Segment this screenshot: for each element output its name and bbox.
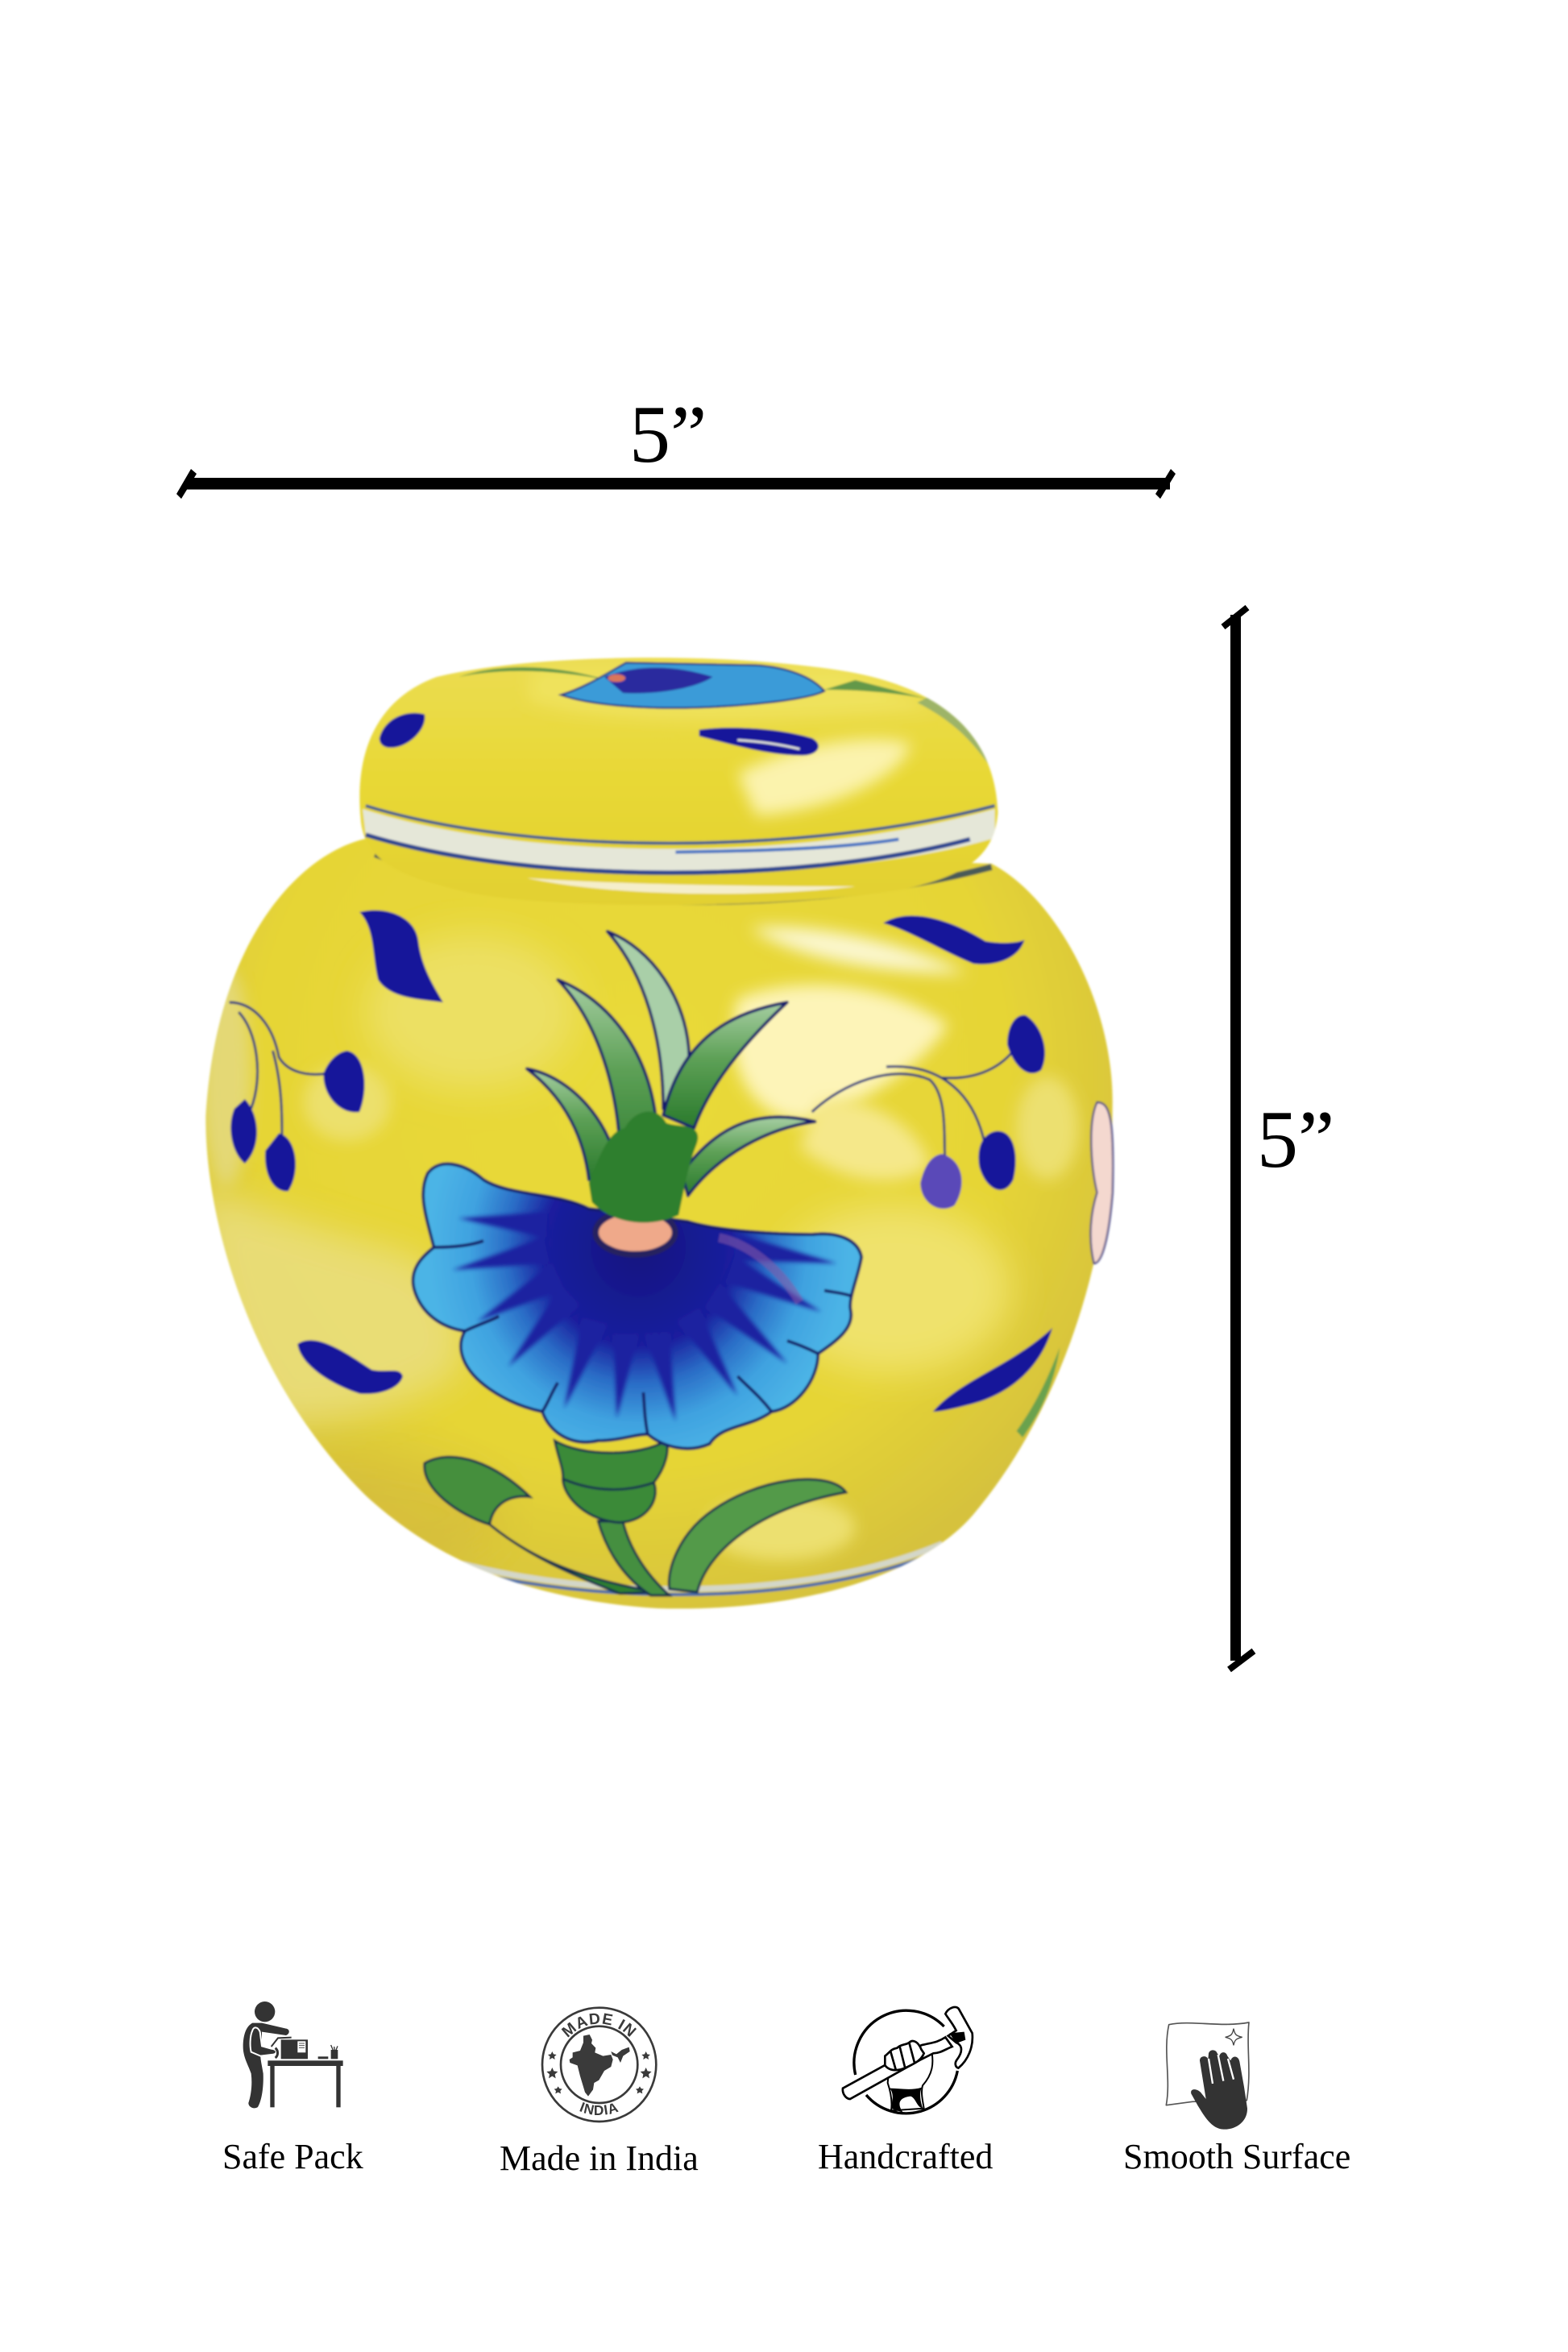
label: safe pack: Safe Pack xyxy=(222,2137,363,2176)
height dimension arrow xyxy=(1223,608,1254,1670)
lid flower xyxy=(561,662,824,708)
lid markings xyxy=(380,713,819,756)
jar floral buds and leaves xyxy=(230,911,1113,1437)
icon: made in india seal xyxy=(541,2006,657,2122)
label: handcrafted: Handcrafted xyxy=(818,2137,993,2176)
icon: made in india seal: INDIA xyxy=(579,2101,619,2115)
width dimension arrow xyxy=(176,469,1176,499)
label: made in india: Made in India xyxy=(500,2138,699,2178)
jar illustration xyxy=(198,657,1113,1608)
icon: made in india seal: MADE IN xyxy=(561,2013,637,2037)
flower stem and lower leaves xyxy=(425,1441,846,1595)
flower top leaves xyxy=(527,931,815,1222)
height label: 5” xyxy=(1257,1094,1334,1185)
label: smooth surface: Smooth Surface xyxy=(1123,2137,1350,2176)
jar body xyxy=(198,838,1113,1608)
blue flower xyxy=(413,1164,861,1449)
jar lid xyxy=(359,657,998,905)
flower collar xyxy=(595,1210,675,1255)
width label: 5” xyxy=(629,389,707,480)
infographic canvas xyxy=(176,408,1350,2171)
icon: hammer in fist xyxy=(843,2007,973,2113)
icon: safe pack xyxy=(243,2001,343,2108)
icon: hand wiping cloth xyxy=(1166,2022,1249,2130)
